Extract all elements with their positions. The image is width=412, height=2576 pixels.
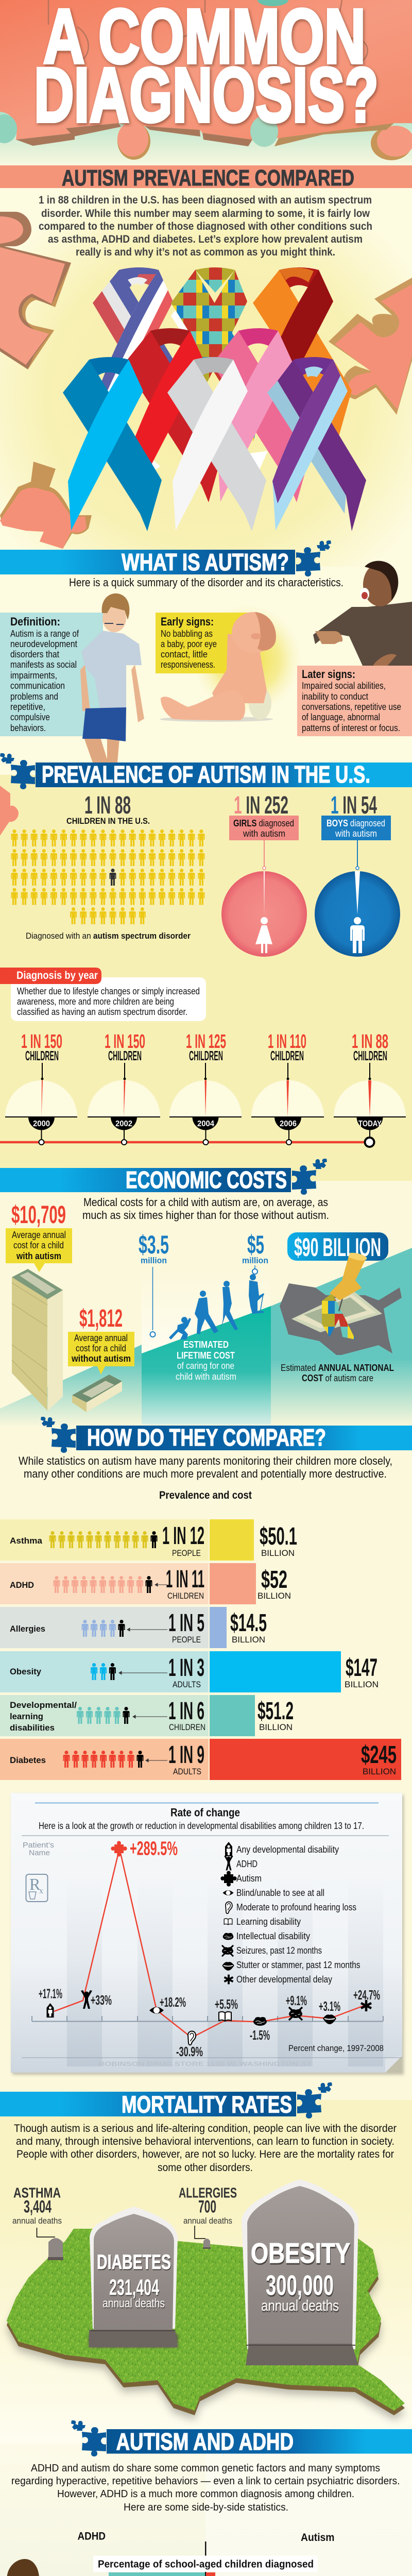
ribbon: flag colours [93,267,184,441]
text: economic costs intro: much as six times higher than for those without autism. [82,1209,329,1222]
panel: definition: communication [10,681,65,691]
timeline item 2000 [5,1031,77,1145]
gravestone: obesity [242,2179,358,2365]
illustration: boy in plaid shirt [7,2559,101,2576]
panel: rate of change prescription paper: ROBINSON DRUG STORE 1100 W. WASHINGTON ST [98,2060,312,2067]
legend: disability icons: Seizures, past 12 months [236,1945,322,1956]
data labels: +289.5% [130,1838,178,1860]
stat: lifetime cost: LIFETIME COST [177,1350,235,1361]
gravestone: obesity: 300,000 [266,2269,334,2301]
panel: later signs [297,666,412,736]
legend: disability icons: Autism [236,1873,262,1884]
panel: definition: manifests as social [10,659,77,670]
timeline item 2006: 2006 [280,1120,297,1128]
panel: diagnosis by year: Whether due to lifestyle changes or simply increased [17,986,200,996]
data labels: -30.9% [176,2044,203,2059]
row: asthma: BILLION [261,1548,295,1558]
panel: rate of change prescription paper: Rate of change [170,1806,240,1819]
timeline item 2004: 1 IN 125 [186,1031,226,1053]
heading band: mortality rates: MORTALITY RATES [122,2091,292,2117]
stat: cost without autism: cost for a child [76,1343,126,1353]
text: economic costs intro [82,1196,329,1222]
row: ADHD: $52 [261,1566,287,1594]
gravestone and label: allergies: ALLERGIES [179,2185,237,2201]
row: allergies: 1 IN 5 [168,1609,204,1637]
gravestone and label: allergies [179,2185,237,2249]
row: asthma: PEOPLE [172,1548,201,1558]
ribbon: pink [212,328,311,502]
timeline item 2000: 2000 [33,1120,50,1128]
illustration: boy in t-shirt [80,594,144,762]
heading band: how do they compare [41,1417,412,1453]
row: allergies: BILLION [232,1635,265,1645]
row: developmental disabilities: CHILDREN [169,1722,205,1732]
panel: later signs: of language, abnormal [302,712,380,722]
ribbon: blue [63,357,162,531]
icon: tall stack of money [12,1269,63,1411]
stat: cost without autism: Average annual [74,1333,128,1343]
stat: lifetime cost: $5 [247,1230,264,1259]
stat: boys 1 in 54 [315,792,400,957]
panel: rate of change prescription paper: Patient’s [23,1841,54,1850]
stat: boys 1 in 54: 1 IN 54 [331,792,377,819]
row: developmental disabilities: learning [10,1711,43,1721]
legend: disability icons: Learning disability [236,1917,301,1927]
stat: girls 1 in 252: 1 IN 252 [234,792,288,819]
legend: disability icons: Moderate to profound hearing loss [236,1902,356,1912]
ribbon: purple and light blue [267,357,366,531]
panel: diagnosis by year [0,968,206,1021]
row: ADHD: BILLION [258,1591,291,1601]
row: allergies [0,1607,267,1648]
row: allergies: $14.5 [230,1609,267,1637]
column headings [77,2531,335,2544]
panel: definition: disorders that [10,649,59,659]
icon: Rx symbol [26,1874,47,1902]
text: autism and ADHD intro: However, ADHD is a much more common diagnosis among children. [57,2488,354,2500]
row: asthma: $50.1 [260,1523,297,1550]
text: autism and ADHD intro [11,2463,400,2513]
text: autism and ADHD intro: Here are some side-by-side statistics. [124,2502,288,2513]
row: developmental disabilities: BILLION [259,1722,293,1732]
ribbon: white [167,357,266,531]
illustration: baby [160,612,276,722]
stat: cost with autism [6,1201,72,1272]
heading band: autism and ADHD: AUTISM AND ADHD [116,2428,294,2455]
icon: Rx symbol: x [39,1887,43,1895]
legend: disability icons: Intellectual disability [236,1931,310,1941]
map of the US with bills and pin [280,1253,402,1355]
stat: girls 1 in 252: GIRLS diagnosed [233,818,294,828]
ribbon: red [124,328,223,502]
row: asthma: Asthma [10,1536,43,1546]
panel: later signs: Impaired social abilities, [302,681,386,691]
heading band: how do they compare: HOW DO THEY COMPARE? [87,1424,326,1451]
data labels: -1.5% [250,2027,270,2043]
intro text: 1 in 88 children in the U.S. has been diagnosed with an autism spectrum [39,194,372,206]
illustration: shouting boy [313,561,412,670]
data labels: +17.1% [39,1986,62,2002]
stat: cost without autism [68,1305,134,1375]
data labels: +18.2% [160,1994,186,2010]
decorative puzzle pieces [0,212,412,836]
text: economic costs intro: Medical costs for a child with autism are, on average, as [83,1196,328,1209]
stat: lifetime cost: million [141,1256,167,1265]
row: obesity: ADULTS [173,1680,201,1689]
gravestone: obesity: OBESITY [251,2237,350,2269]
gravestone: diabetes: 231,404 [109,2275,159,2300]
legend: disability icons: Stutter or stammer, past 12 months [236,1960,360,1970]
text: mortality intro: some other disorders. [158,2162,253,2174]
pictogram: 88 children [11,829,204,924]
timeline item 2002 [88,1031,160,1145]
panel: early signs: contact, little [161,649,208,659]
row: ADHD: 1 IN 11 [166,1566,204,1593]
silhouettes: child growing to old age [169,1274,264,1340]
panel: definition: repetitive, [10,702,45,712]
legend: disability icons: Blind/unable to see at all [236,1888,324,1898]
text: mortality intro [14,2123,397,2174]
gravestone and label: allergies: 700 [198,2197,216,2217]
stat: 90 billion national cost: Estimated ANNUAL NATIONAL [281,1363,394,1373]
subheading: prevalence and cost: Prevalence and cost [159,1489,252,1501]
column headings: ADHD [77,2531,106,2542]
timeline item 2002: CHILDREN [108,1048,142,1063]
row: allergies: Allergies [10,1624,45,1634]
panel: early signs: No babbling as [161,629,213,639]
teal ground with cost panels [0,1248,412,1427]
text: compare intro [19,1454,392,1480]
stat: cost without autism: $1,812 [79,1305,123,1332]
panel: definition [0,613,103,736]
data labels: +9.1% [286,1993,307,2008]
intro text: as asthma, ADHD and diabetes. Let’s explore how prevalent autism [48,233,363,245]
panel: definition: problems and [10,691,58,702]
stat: 1 in 88 children: 1 IN 88 [84,792,131,819]
stat: cost with autism: cost for a child [13,1240,64,1250]
stat: lifetime cost: child with autism [176,1371,236,1382]
stat: lifetime cost: $3.5 [139,1230,169,1259]
legend: disability icons: Other developmental delay [236,1974,332,1985]
comparison: percentage of school-aged children [93,2555,318,2576]
row: developmental disabilities: $51.2 [258,1698,294,1725]
text: mortality intro: and many, through intensive behavioral interventions, can learn to function in society. [16,2136,394,2147]
stat: 90 billion national cost [280,1232,402,1383]
white gaps under ribbons [144,451,268,482]
text: autism and ADHD intro: ADHD and autism do share some common genetic factors and many symptoms [31,2463,380,2474]
panel: definition: neurodevelopment [10,639,77,649]
heading band: autism and ADHD [71,2420,412,2456]
panel: early signs: Early signs: [161,615,214,628]
stat: boys 1 in 54: with autism [335,828,377,839]
row: obesity: Obesity [10,1667,42,1676]
gravestone and label: asthma: ASTHMA [13,2185,61,2201]
map: grass United States [7,2229,405,2420]
panel: later signs: Later signs: [302,668,355,681]
intro text [39,194,372,258]
timeline item 2002: 2002 [115,1120,132,1128]
panel: diagnosis by year: Diagnosis by year [16,970,98,981]
timeline item today [334,1031,406,1147]
gravestone and label: asthma [12,2185,63,2260]
column headings: Autism [301,2532,335,2544]
data labels: +24.7% [353,1987,380,2003]
timeline item 2006 [251,1031,324,1145]
heading band: prevalence [0,753,412,789]
row: obesity: BILLION [345,1680,379,1689]
row: ADHD [0,1563,291,1604]
timeline item 2006: 1 IN 110 [268,1031,306,1053]
row: asthma [0,1519,297,1561]
panel: early signs [156,605,301,714]
timeline item today: TODAY [358,1120,382,1128]
data labels: +33% [91,1992,112,2008]
gravestone: diabetes [89,2207,178,2347]
row: allergies: PEOPLE [172,1635,201,1645]
gravestone and label: asthma: annual deaths [12,2216,62,2226]
line chart: rate of change [32,1838,384,2059]
row: obesity [0,1651,379,1692]
puzzle header artwork [0,0,412,160]
panel: early signs: a baby, poor eye [161,639,217,649]
row: diabetes: 1 IN 9 [168,1741,204,1769]
icon: small stack of money [72,1375,122,1412]
row: obesity: $147 [346,1654,377,1682]
heading band: mortality rates [0,2082,332,2119]
gravestone and label: asthma: 3,404 [24,2197,52,2217]
stat: cost with autism: $10,709 [11,1201,66,1229]
timeline item 2006: CHILDREN [270,1048,304,1063]
ribbon: orange and dark red [253,267,352,442]
stat: cost without autism: without autism [71,1353,131,1364]
awareness ribbons [63,267,366,531]
panel: diagnosis by year: awareness, more and more children are being [17,996,174,1007]
data icons [46,1841,371,2045]
gravestone: diabetes: DIABETES [97,2251,171,2274]
timeline item 2004: 2004 [197,1120,214,1128]
timeline item 2000: CHILDREN [25,1048,59,1063]
panel: rate of change prescription paper [11,1793,404,2075]
gravestone: obesity: annual deaths [261,2297,339,2314]
intro text: disorder. While this number may seem alarming to some, it is fairly low [41,208,370,219]
stat: lifetime cost: of caring for one [177,1361,234,1371]
comparison: percentage of school-aged children: Percentage of school-aged children diagnosed [98,2559,314,2570]
stat: lifetime cost [139,1230,268,1382]
intro text: compared to the number of those diagnosed with other conditions such [39,221,372,232]
timeline item 2004: CHILDREN [189,1048,223,1063]
heading band: economic costs: ECONOMIC COSTS [126,1166,287,1193]
stat: boys 1 in 54: BOYS diagnosed [327,818,385,828]
panel: later signs: inability to conduct [302,691,368,702]
icon: Rx symbol: R [29,1875,41,1893]
timeline: diagnosis by year [0,1031,406,1147]
caption: diagnosed with an autism spectrum disorder: Diagnosed with an autism spectrum disorder [26,931,191,941]
timeline item 2004 [169,1031,242,1145]
text: autism and ADHD intro: regarding hyperactive, repetitive behaviors — even a link to certain psychiatric disorders. [11,2476,400,2487]
stat: 1 in 88 children: CHILDREN IN THE U.S. [66,816,150,826]
gravestone and label: allergies: annual deaths [183,2216,232,2226]
gravestone: diabetes: annual deaths [102,2297,165,2311]
stat: lifetime cost: million [242,1256,268,1265]
row: developmental disabilities: 1 IN 6 [168,1698,204,1725]
row: obesity: 1 IN 3 [168,1654,204,1682]
panel: rate of change prescription paper: Name [29,1849,50,1857]
center axis line [205,2541,206,2576]
stat: girls 1 in 252: with autism [243,828,285,839]
row: diabetes: BILLION [363,1767,396,1776]
panel: definition: Definition: [10,615,60,628]
row: ADHD: CHILDREN [167,1591,204,1601]
line chart: rate of change: Percent change, 1997-2008 [288,2043,384,2053]
legend: disability icons [220,1842,360,1985]
panel: definition: impairments, [10,670,57,681]
row: asthma: 1 IN 12 [162,1522,204,1550]
row: diabetes: Diabetes [10,1755,46,1765]
data labels [39,1838,380,2059]
panel: definition: behaviors. [10,723,46,733]
timeline item 2000: 1 IN 150 [21,1031,62,1053]
panel: definition: compulsive [10,712,50,722]
stat: 90 billion national cost: COST of autism care [302,1373,373,1383]
data labels: +3.1% [319,1998,340,2014]
panel: early signs: responsiveness. [161,659,215,670]
stat: cost with autism: Average annual [12,1230,66,1240]
heading band: what is autism [0,540,331,577]
panel: diagnosis by year: classified as having an autism spectrum disorder. [17,1007,187,1017]
row: developmental disabilities: disabilities [10,1723,55,1733]
heading band: economic costs [0,1159,327,1195]
subtitle: what is autism: Here is a quick summary of the disorder and its characteristics. [69,576,344,589]
ribbon: puzzle pattern [171,267,266,442]
row: developmental disabilities [0,1695,294,1736]
stat: lifetime cost: ESTIMATED [183,1340,229,1350]
stat: girls 1 in 252 [221,792,307,957]
row: diabetes [0,1739,401,1780]
data labels: +5.5% [215,1996,238,2012]
panel: definition: Autism is a range of [10,629,79,639]
row: ADHD: ADHD [10,1580,34,1590]
heading band: what is autism: WHAT IS AUTISM? [122,549,289,575]
row: developmental disabilities: Developmental/ [10,1700,77,1710]
timeline item 2002: 1 IN 150 [105,1031,145,1053]
intro text: really is and why it’s not as common as you might think. [76,246,335,258]
row: diabetes: ADULTS [173,1767,201,1776]
stat: 1 in 88 children [66,792,150,826]
title [34,0,379,138]
legend: disability icons: Any developmental disability [236,1844,339,1855]
legend: disability icons: ADHD [236,1859,258,1869]
stat: cost with autism: with autism [16,1251,61,1261]
